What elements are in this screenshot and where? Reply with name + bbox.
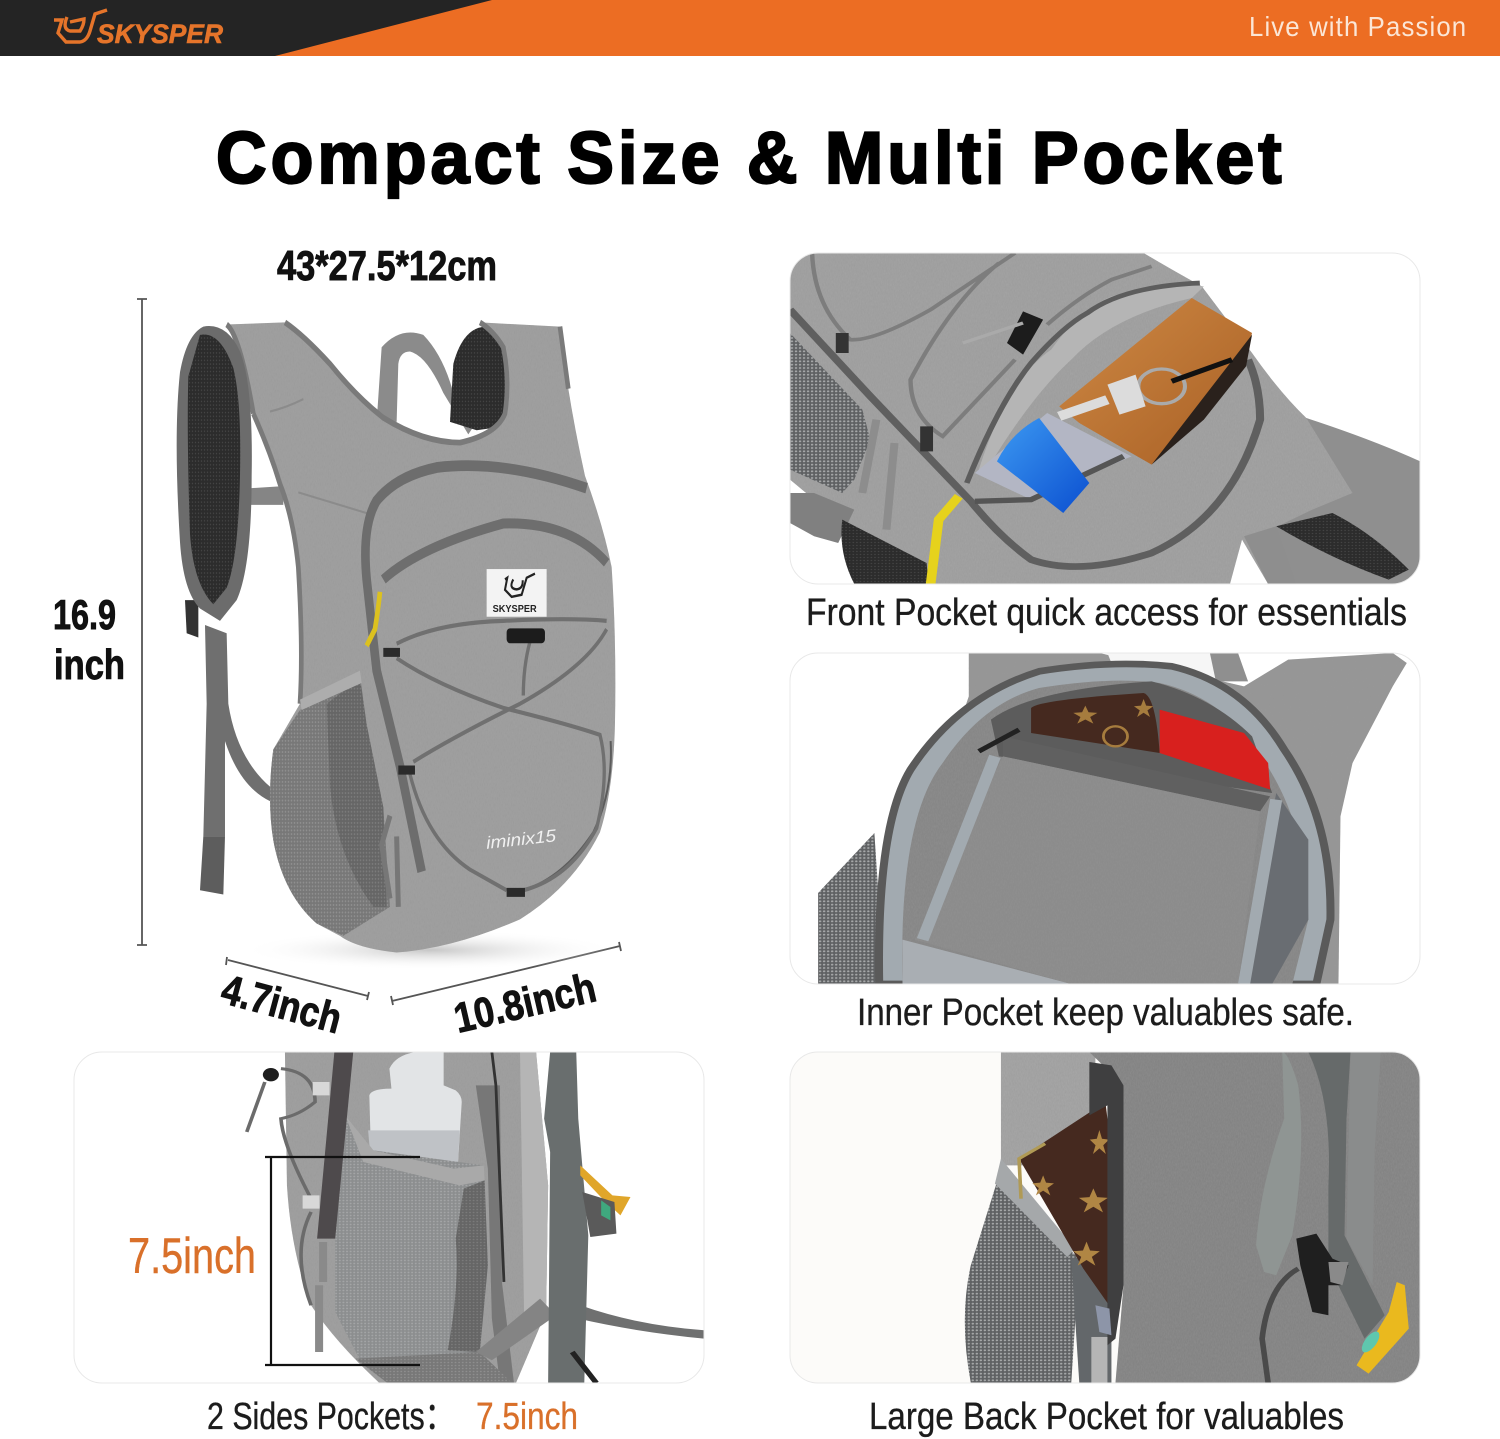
light edge (520, 1052, 548, 1312)
slogan: Live with Passion (1249, 11, 1466, 42)
back pocket photo (790, 1052, 1420, 1383)
ground shadow (240, 930, 620, 970)
hanging loop (1256, 1052, 1301, 1275)
zip band (1012, 758, 1270, 812)
cord lock (507, 628, 545, 643)
caption: Front Pocket quick access for essentials (806, 592, 1407, 634)
pouch zipper pull (1019, 1144, 1045, 1199)
main backpack dimensions (53, 242, 621, 1042)
side band (995, 1159, 1075, 1257)
width measure line (391, 942, 621, 1005)
pocket height label: 7.5inch (128, 1228, 256, 1284)
yellow buckle (580, 1165, 630, 1215)
rear padding (450, 327, 507, 430)
pocket panel (1002, 756, 1260, 812)
front pocket photo (790, 253, 1420, 584)
cords (812, 253, 1152, 436)
mesh side darker (448, 1180, 488, 1352)
title: Compact Size & Multi Pocket (216, 118, 1282, 199)
zipper pulls (382, 816, 398, 907)
caption: 2 Sides Pockets： (207, 1396, 455, 1438)
teal tab (1358, 1329, 1383, 1355)
bungee cords (397, 619, 607, 890)
handle (1210, 653, 1248, 681)
zipper pulls (319, 1242, 323, 1352)
body fabric (285, 1052, 548, 1383)
panel: inner pocket (790, 653, 1420, 1034)
back zip band (476, 1085, 514, 1383)
buckle (1296, 1234, 1349, 1315)
lining patch (1095, 1305, 1111, 1335)
lower strap (476, 1299, 556, 1360)
panel border (74, 1052, 704, 1383)
side column (1346, 1052, 1381, 1285)
buckle prong (1328, 1262, 1349, 1285)
dimension label: centimetres: 43*27.5*12cm (277, 242, 497, 289)
red pouch (1160, 710, 1270, 790)
side mesh (818, 833, 884, 984)
panel border (790, 253, 1420, 584)
mesh pocket (965, 1182, 1079, 1383)
back zip (492, 1052, 504, 1282)
side mesh pocket (270, 675, 390, 936)
side pocket photo (74, 1052, 704, 1383)
upper shadow (991, 681, 1272, 793)
cord clips (383, 652, 525, 892)
flap outline (1262, 1269, 1298, 1383)
pocket lining (979, 286, 1204, 470)
zipper rim (879, 664, 1331, 984)
cord lock (263, 1068, 279, 1081)
shoulder strap mesh (188, 334, 240, 604)
dark seam (1071, 1259, 1111, 1383)
backpack body (227, 322, 615, 952)
header banner (0, 0, 1500, 56)
brand logo (54, 10, 223, 49)
lower mesh (355, 1352, 512, 1383)
shoulder strap (1308, 1052, 1385, 1339)
body piping (227, 322, 568, 704)
lining bottom (903, 940, 1071, 984)
lower lip (975, 456, 1123, 501)
zip strip (317, 1052, 353, 1239)
panel: back pocket (790, 1052, 1420, 1438)
cord clips (311, 1082, 321, 1209)
keys (1059, 360, 1232, 416)
main fabric (1089, 1052, 1420, 1383)
panel border (790, 653, 1420, 984)
lining right (1250, 793, 1308, 984)
height label: inch (54, 641, 125, 688)
strap webbing (1244, 526, 1296, 584)
cord lock (1007, 311, 1043, 355)
pocket opening (1089, 1062, 1123, 1345)
height label: 16.9 (53, 591, 116, 638)
back fabric (966, 654, 1407, 984)
top handle (377, 333, 477, 434)
brand logo: SKYSPER (97, 19, 223, 49)
model name: iminix15 (486, 827, 557, 853)
teal tab (601, 1200, 610, 1220)
yellow zipper pull (367, 592, 380, 646)
depth label: 4.7inch (217, 965, 347, 1042)
zipper pulls (862, 420, 894, 530)
yellow pull (931, 496, 959, 584)
inner pocket photo (790, 653, 1420, 984)
depth measure line (226, 957, 369, 1000)
main backpack illustration (177, 322, 615, 952)
buckle clip (582, 1192, 616, 1237)
inner fabric (902, 681, 1308, 984)
cord clips (842, 333, 927, 451)
upper side fabric (1001, 1052, 1095, 1165)
panel: front pocket (790, 253, 1420, 634)
zipper (1091, 1337, 1107, 1383)
lower strap (790, 493, 854, 543)
dark pocket interior (975, 413, 1132, 500)
shoulder strap pad (1274, 418, 1420, 584)
height bracket (265, 1157, 420, 1365)
blue bottle (997, 418, 1089, 513)
panel: side pockets (74, 1052, 704, 1438)
caption: Large Back Pocket for valuables (869, 1396, 1344, 1438)
notebook (1059, 298, 1252, 465)
neck opening (1108, 654, 1215, 678)
yellow clip (1357, 1282, 1409, 1374)
cord pull (963, 323, 1023, 343)
lower cord knots (572, 1352, 596, 1383)
mesh pocket shadow (327, 679, 387, 907)
pocket binding (923, 756, 1276, 984)
side mesh (790, 333, 870, 493)
water bottle (368, 1052, 462, 1167)
body seams (270, 399, 367, 513)
shoulder strap mesh (1276, 513, 1409, 580)
pocket rim band (345, 1115, 485, 1185)
mesh side pocket (335, 1115, 488, 1362)
brown pouch (1019, 1102, 1111, 1309)
brown pouch (1031, 693, 1160, 753)
width label: 10.8inch (449, 964, 600, 1042)
notebook spine (1152, 335, 1252, 465)
inner zipper (383, 523, 607, 579)
outer zipper (365, 466, 587, 872)
caption: 7.5inch (476, 1396, 578, 1438)
side connector (250, 486, 283, 505)
caption: Inner Pocket keep valuables safe. (857, 992, 1354, 1034)
lower seam (523, 741, 611, 890)
strap buckle (185, 600, 198, 637)
brand label: SKYSPER (493, 603, 537, 614)
outer zipper (967, 283, 1200, 483)
height measure line (137, 299, 147, 945)
body fabric (790, 253, 1420, 584)
zip slider (979, 730, 1019, 751)
cords (247, 1069, 315, 1305)
mesh pocket band (300, 671, 362, 710)
brand label (487, 569, 547, 617)
hanging strap (203, 625, 270, 836)
shoulder strap (177, 326, 252, 621)
panel border (790, 1052, 1420, 1383)
lower mesh pad (841, 520, 929, 584)
rear cord (578, 1305, 704, 1339)
strap end tab (200, 836, 225, 894)
pocket seam (790, 310, 1260, 567)
height label (53, 591, 125, 688)
shoulder strap (544, 1052, 588, 1383)
